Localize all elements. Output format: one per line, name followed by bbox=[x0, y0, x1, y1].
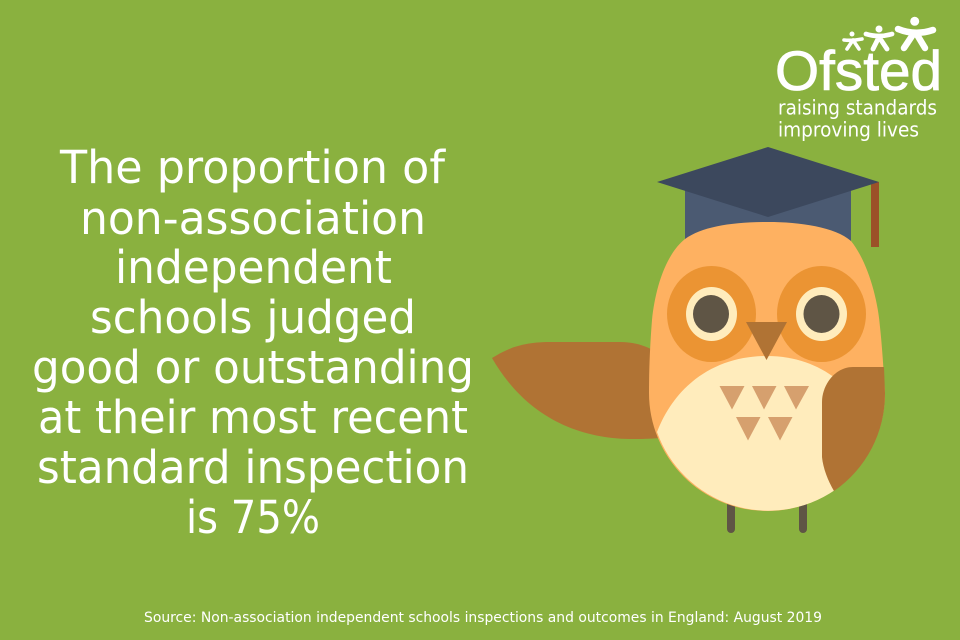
main statement text: schools judged bbox=[90, 291, 416, 344]
logo wordmark: Ofsted bbox=[775, 39, 942, 102]
left eye bbox=[667, 266, 756, 362]
right wing bbox=[822, 367, 885, 491]
owl legs bbox=[727, 495, 807, 533]
logo strapline: raising standards bbox=[778, 96, 937, 120]
chest feathers bbox=[720, 386, 809, 440]
logo figures bbox=[844, 17, 933, 49]
main statement text: non-association bbox=[80, 192, 426, 245]
mortarboard bbox=[657, 147, 879, 217]
main statement text: good or outstanding bbox=[32, 341, 474, 394]
Ofsted logo bbox=[775, 17, 942, 141]
left wing bbox=[492, 342, 660, 439]
main statement text: The proportion of bbox=[59, 141, 446, 194]
owl body bbox=[649, 222, 885, 511]
main statement text: at their most recent bbox=[38, 391, 468, 444]
main statement text: standard inspection bbox=[37, 441, 469, 494]
main statement text: is 75% bbox=[186, 491, 320, 544]
source note: Source: Non-association independent schools inspections and outcomes in England: August 2019 bbox=[144, 610, 822, 626]
cap base bbox=[685, 188, 851, 250]
main statement text: independent bbox=[115, 241, 392, 294]
beak bbox=[746, 322, 787, 360]
right eye bbox=[777, 266, 866, 362]
Ofsted logo: improving lives bbox=[778, 118, 919, 142]
main statement text bbox=[32, 141, 474, 544]
owl illustration bbox=[492, 147, 885, 533]
belly bbox=[657, 356, 835, 511]
tassel bbox=[871, 182, 879, 247]
